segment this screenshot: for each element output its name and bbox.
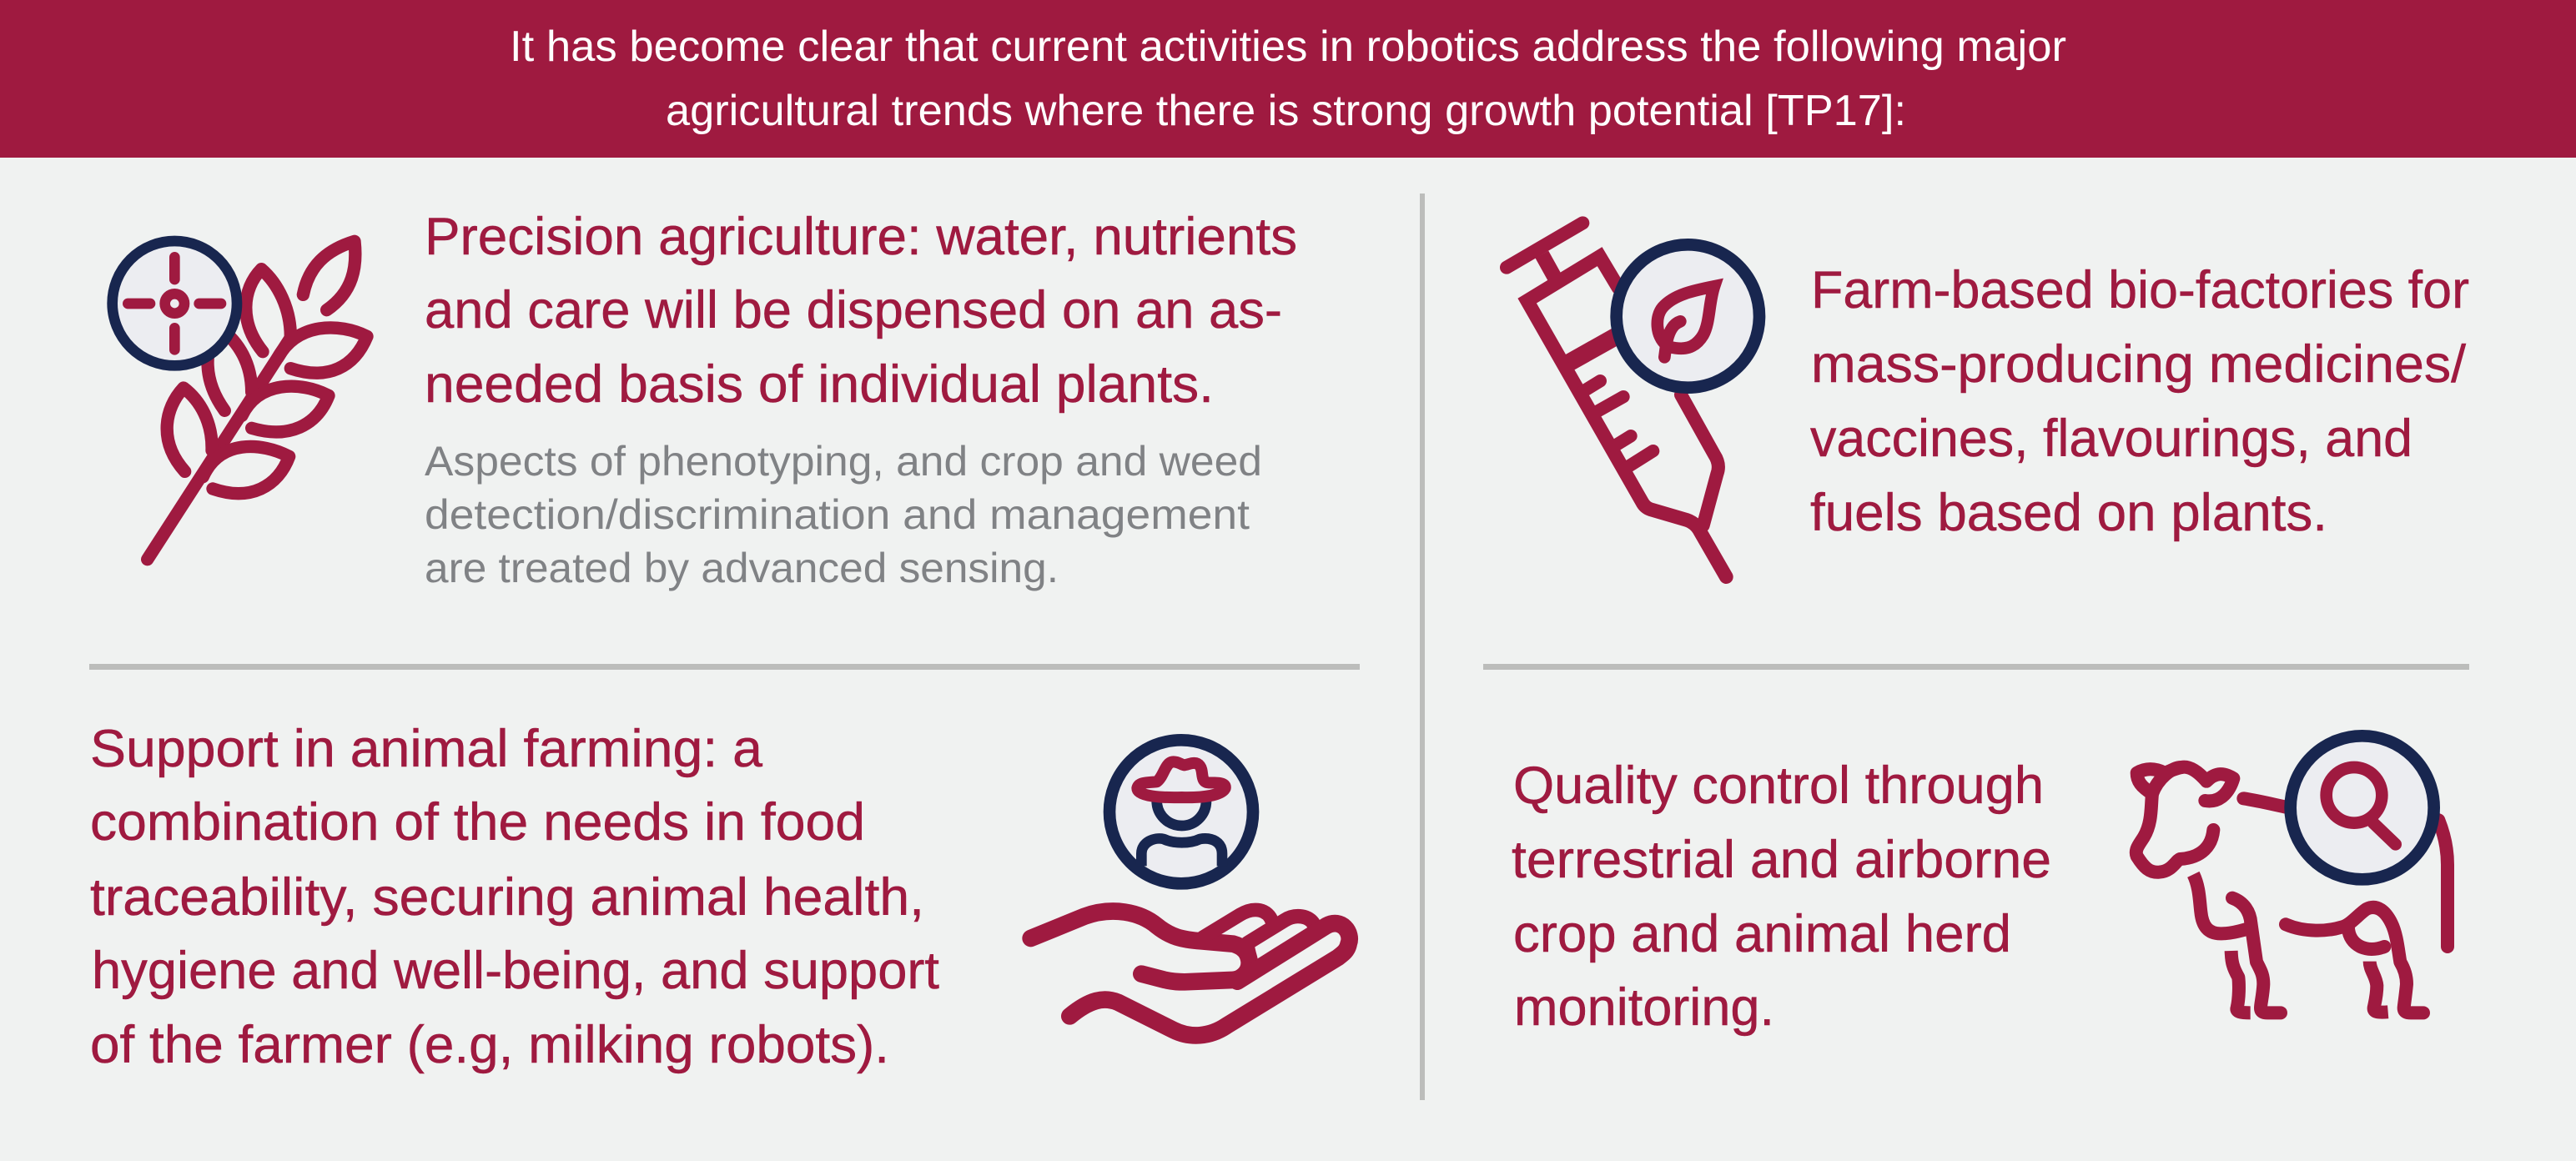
- heading: bio-factories: fuels based on plants.: [1810, 484, 2327, 542]
- heading: bio-factories: mass-producing medicines/: [1811, 335, 2467, 394]
- header banner: It has become clear that current activities in robotics address the following major: [510, 23, 2066, 71]
- heading: quality control: terrestrial and airborne: [1512, 831, 2051, 889]
- icon: hand holding farmer: [1031, 740, 1350, 1035]
- panel: animal farming: [90, 720, 1350, 1074]
- heading: precision agriculture: and care will be dispensed on an as-: [425, 281, 1282, 339]
- panel: precision agriculture: [113, 208, 1297, 591]
- heading: animal farming: combination of the needs in food: [90, 793, 865, 852]
- header banner: [0, 0, 2576, 158]
- panel: quality control: [1512, 736, 2448, 1037]
- heading: bio-factories: [1810, 261, 2469, 542]
- heading: bio-factories: Farm-based bio-factories for: [1811, 261, 2469, 319]
- heading: precision agriculture: [425, 208, 1297, 414]
- panel: bio-factories: [1507, 223, 2469, 577]
- heading: animal farming: hygiene and well-being, and support: [92, 942, 939, 1000]
- text block: advanced sensing note: detection/discrimination and management: [425, 491, 1250, 538]
- heading: precision agriculture: Precision agriculture: water, nutrients: [425, 208, 1297, 266]
- heading: bio-factories: vaccines, flavourings, and: [1810, 410, 2412, 468]
- text block: advanced sensing note: are treated by advanced sensing.: [425, 545, 1059, 591]
- heading: quality control: monitoring.: [1514, 978, 1774, 1037]
- heading: animal farming: of the farmer (e.g, milking robots).: [90, 1016, 889, 1074]
- header banner: agricultural trends where there is strong growth potential [TP17]:: [666, 87, 1906, 135]
- text block: advanced sensing note: [425, 438, 1262, 591]
- heading: animal farming: [90, 720, 939, 1074]
- heading: precision agriculture: needed basis of individual plants.: [425, 355, 1214, 414]
- icon: cow with magnifier: [2136, 736, 2448, 1013]
- heading: quality control: crop and animal herd: [1513, 905, 2011, 963]
- icon: wheat with target: [113, 241, 367, 560]
- heading: animal farming: traceability, securing animal health,: [90, 868, 924, 927]
- icon: syringe with leaf: [1507, 223, 1759, 577]
- text block: advanced sensing note: Aspects of phenotyping, and crop and weed: [425, 438, 1262, 485]
- heading: animal farming: Support in animal farming: a: [90, 720, 763, 778]
- heading: quality control: Quality control through: [1513, 756, 2044, 815]
- heading: quality control: [1512, 756, 2051, 1037]
